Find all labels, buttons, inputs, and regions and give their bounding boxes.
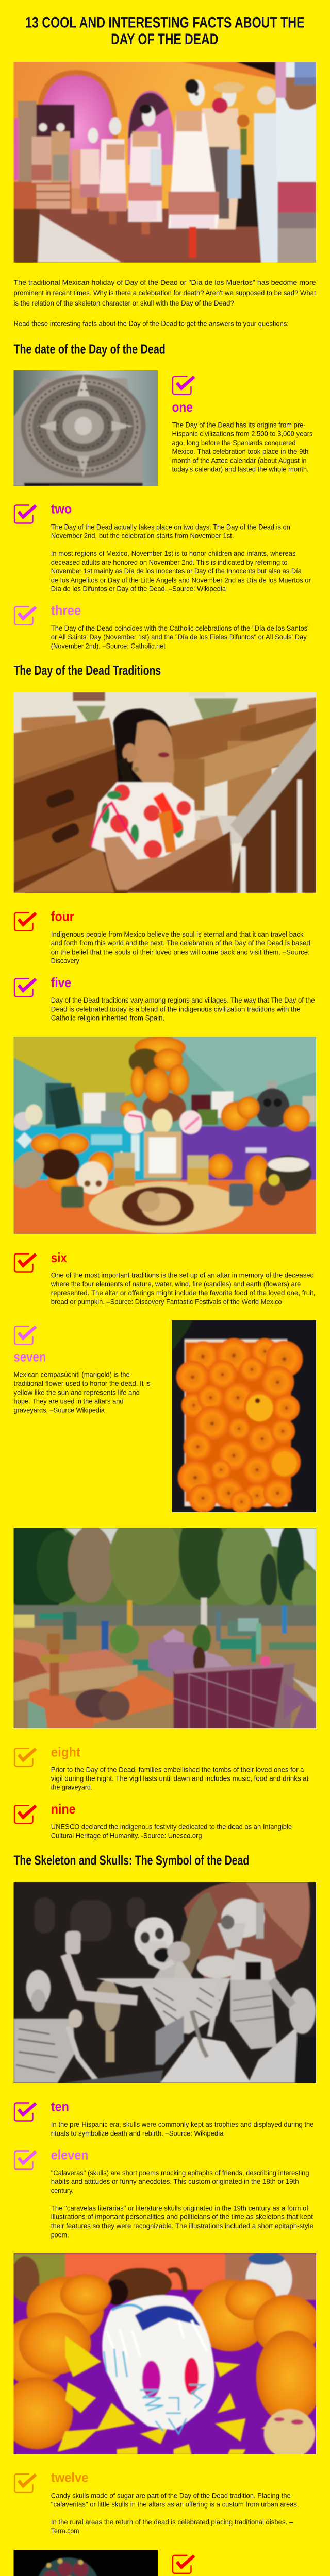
text six: represented. The altar or offerings might include the favorite food of the loved one, fruit, <box>51 1289 316 1297</box>
label six: six <box>51 1250 67 1265</box>
text five: Dead is celebrated today is a blend of the indigenous civilization traditions with the <box>51 1005 301 1013</box>
text seven: traditional flower used to honor the dead. It is <box>13 1379 151 1387</box>
text six <box>51 1271 316 1306</box>
fact six <box>14 1250 316 1306</box>
label two: two <box>51 501 72 517</box>
label ten: ten <box>51 2099 69 2114</box>
text eight: the graveyard. <box>51 1783 93 1791</box>
icon: check three <box>14 606 37 624</box>
label eleven: eleven <box>51 2147 89 2163</box>
text one: ago, long before the Spaniards conquered <box>172 438 296 447</box>
photo: woman in embroidered blouse in church pew <box>13 692 316 893</box>
label twelve: twelve <box>51 2470 89 2485</box>
fact four <box>14 908 310 964</box>
text eleven: century. <box>51 2186 74 2194</box>
text nine: UNESCO declared the indigenous festivity dedicated to the dead as an Intangible <box>51 1822 292 1831</box>
text eight <box>51 1765 308 1791</box>
heading: skeletons: The Skeleton and Skulls: The Symbol of the Dead <box>13 1852 249 1868</box>
text eleven: The "caravelas literarias" or literature skulls originated in the 19th century as a form of <box>51 2204 308 2212</box>
text seven: Mexican cempasúchitl (marigold) is the <box>13 1370 130 1379</box>
text twelve: In the rural areas the return of the dead is celebrated placing traditional dishes. – <box>51 2518 293 2526</box>
photo: colourful cemetery with crosses <box>13 1528 316 1728</box>
label nine: nine <box>51 1801 76 1817</box>
heading: traditions: The Day of the Dead Traditions <box>13 663 161 678</box>
icon: check thirteen <box>173 2554 195 2573</box>
text twelve: Candy skulls made of sugar are part of the Day of the Dead tradition. Placing the <box>51 2491 291 2499</box>
text seven: yellow like the sun and represents life and <box>13 1388 140 1396</box>
text three: or All Saints' Day (November 1st) and the "Día de los Fieles Difuntos" or All Souls' Day <box>51 633 307 641</box>
icon: check six <box>14 1253 37 1272</box>
text eight: Prior to the Day of the Dead, families embellished the tombs of their loved ones for a <box>51 1765 304 1773</box>
intro text: prominent in recent times. Why is there a celebration for death? Aren't we supposed to be sad? What <box>13 289 316 297</box>
icon: check ten <box>14 2102 37 2121</box>
text eleven: habits and attitudes or funny anecdotes. This custom originated in the 18th or 19th <box>51 2177 299 2185</box>
text twelve <box>51 2491 299 2535</box>
fact three <box>14 602 310 650</box>
fact five <box>14 975 315 1022</box>
label three: three <box>51 602 81 618</box>
text ten: In the pre-Hispanic era, skulls were commonly kept as trophies and displayed during the <box>51 2120 314 2128</box>
heading: date: The date of the Day of the Dead <box>13 342 166 357</box>
intro text: Read these interesting facts about the Day of the Dead to get the answers to your questions: <box>13 319 289 328</box>
text two: November 1st mainly as Día de los Inocentes or Day of the Innocents but also as Día <box>51 567 302 575</box>
text twelve: "calaveritas" or little skulls in the altars as an offering is a custom from urban areas. <box>51 2500 299 2508</box>
text one: Mexico. That celebration took place in the 9th <box>172 447 308 455</box>
text two <box>51 522 311 592</box>
icon: check four <box>14 912 37 930</box>
text one: The Day of the Dead has its origins from pre- <box>172 420 306 429</box>
text eight: vigil during the night. The vigil lasts until dawn and includes music, food and drinks at <box>51 1774 308 1783</box>
text four <box>51 930 310 964</box>
text nine: Cultural Heritage of Humanity. -Source: Unesco.org <box>51 1831 202 1839</box>
icon: check twelve <box>14 2473 37 2492</box>
text two: deceased adults are honored on November 2nd. This is indicated by referring to <box>51 558 288 566</box>
photo: skull-painted dancers on stage <box>13 62 316 263</box>
fact eight <box>14 1744 308 1791</box>
photo: Aztec calendar stone <box>13 370 158 486</box>
text eleven <box>51 2168 314 2239</box>
text six: where the four elements of nature, water, wind, fire (candles) and earth (flowers) are <box>51 1280 301 1288</box>
text four: Indigenous people from Mexico believe the soul is eternal and that it can travel back <box>51 930 304 938</box>
text ten <box>51 2120 314 2137</box>
fact thirteen <box>172 2554 316 2576</box>
fact ten <box>14 2099 314 2137</box>
text three: The Day of the Dead coincides with the Catholic celebrations of the "Día de los Santos" <box>51 624 310 632</box>
icon: check five <box>14 978 37 996</box>
text eleven: illustrations of important personalities and politicians of the time as skeletons that kept <box>51 2213 313 2221</box>
icon: check nine <box>14 1805 37 1823</box>
text two: de los Angelitos or Day of the Little Angels and November 2nd as Día de los Muertos or <box>51 575 311 584</box>
text one: today's calendar) and lasted the whole month. <box>172 465 309 473</box>
label four: four <box>51 908 74 924</box>
intro text: is the relation of the skeleton character or skull with the Day of the Dead? <box>13 299 234 307</box>
photo: tray of orange marigolds <box>172 1320 316 1512</box>
text nine <box>51 1822 292 1839</box>
text seven <box>13 1370 151 1414</box>
fact one <box>172 376 313 473</box>
photo: white sugar skull among marigolds <box>13 2253 316 2454</box>
text eleven: "Calaveras" (skulls) are short poems mocking epitaphs of friends, describing interesting <box>51 2168 309 2177</box>
photo: papier-mache skeletons <box>13 1882 316 2083</box>
text one: Hispanic civilizations from 2,500 to 3,000 years <box>172 430 313 438</box>
text six: One of the most important traditions is the set up of an altar in memory of the deceased <box>51 1271 314 1279</box>
photo: altar with candles, marigolds and sugar skulls <box>13 1037 316 1234</box>
fact twelve <box>14 2470 299 2535</box>
text four: on the belief that the souls of their loved ones will come back and visit them. –Source: <box>51 947 310 956</box>
intro text: The traditional Mexican holiday of Day of the Dead or "Día de los Muertos" has become more <box>13 278 316 286</box>
intro text <box>13 278 316 328</box>
label five: five <box>51 975 71 990</box>
text eleven: poem. <box>51 2230 69 2239</box>
title: DAY OF THE DEAD <box>111 31 218 48</box>
fact nine <box>14 1801 292 1839</box>
text six: bread or pumpkin. –Source: Discovery Fantastic Festivals of the World Mexico <box>51 1297 282 1306</box>
text twelve: Terra.com <box>51 2527 79 2535</box>
fact eleven <box>14 2147 314 2239</box>
fact two <box>14 501 311 592</box>
icon: check eleven <box>14 2150 37 2169</box>
text two: The Day of the Dead actually takes place on two days. The Day of the Dead is on <box>51 522 290 531</box>
text five: Catholic religion inherited from Spain. <box>51 1013 164 1022</box>
text eleven: their features so they were recognizable. The illustrations included a short epitaph-style <box>51 2222 314 2230</box>
text seven: graveyards. –Source Wikipedia <box>13 1406 105 1414</box>
label one: one <box>172 399 193 415</box>
icon: check eight <box>14 1748 37 1766</box>
text one <box>172 420 313 473</box>
text two: November 2nd, but the celebration starts from November 1st. <box>51 531 234 539</box>
text five <box>51 996 315 1022</box>
text five: Day of the Dead traditions vary among regions and villages. The way that The Day of the <box>51 996 315 1004</box>
text two: In most regions of Mexico, November 1st is to honor children and infants, whereas <box>51 549 296 557</box>
text one: month of the Aztec calendar (about August in <box>172 456 307 464</box>
text ten: rituals to symbolize death and rebirth. –Source: Wikipedia <box>51 2129 224 2137</box>
text three: (November 2nd). –Source: Catholic.net <box>51 641 166 650</box>
fact seven <box>13 1326 151 1414</box>
text four: Discovery <box>51 956 79 964</box>
icon: check one <box>173 376 195 395</box>
text seven: hope. They are used in the altars and <box>13 1397 124 1405</box>
text two: Día de los Difuntos or Day of the Dead. –Source: Wikipedia <box>51 584 226 592</box>
title <box>25 14 305 48</box>
label seven: seven <box>13 1349 46 1364</box>
text three <box>51 624 310 650</box>
icon: check two <box>14 504 37 523</box>
photo: La Catrina figure on black <box>13 2550 158 2576</box>
text four: and forth from this world and the next. The celebration of the Day of the Dead is based <box>51 939 310 947</box>
label eight: eight <box>51 1744 80 1759</box>
icon: check seven <box>14 1326 37 1344</box>
